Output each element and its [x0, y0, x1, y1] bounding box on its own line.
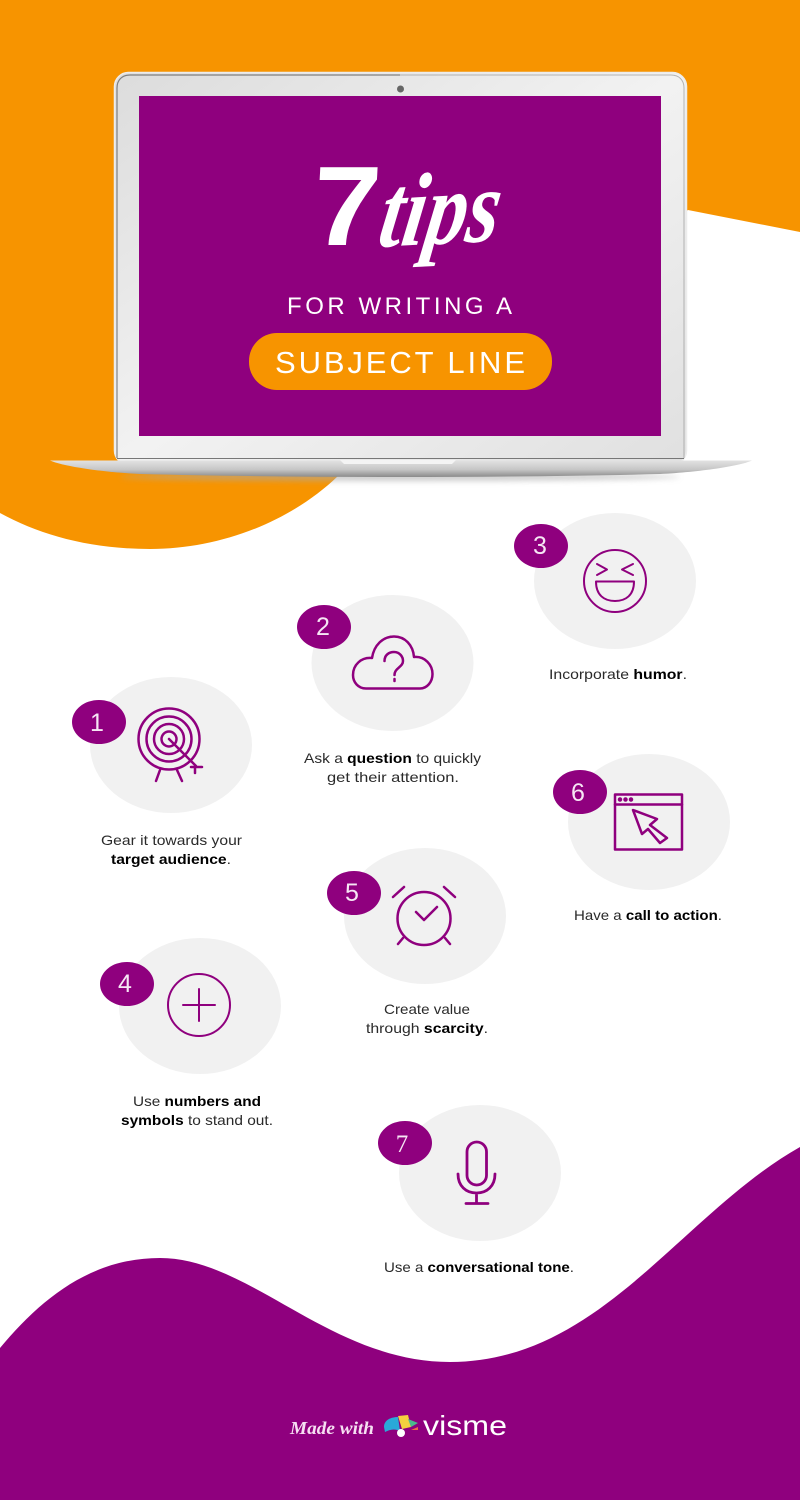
title: 7 tips [310, 142, 511, 270]
badge [100, 962, 154, 1006]
purple bottom wave [0, 1147, 800, 1500]
laptop [50, 72, 752, 481]
icon: browser cursor [615, 794, 682, 850]
logo mark [384, 1415, 418, 1437]
caption: Ask a question to quickly [304, 751, 481, 766]
lid inner edge [117, 75, 400, 458]
blob [90, 677, 252, 813]
tip 3 [514, 513, 696, 682]
pill: subject line: SUBJECT LINE [275, 345, 525, 380]
caption: Gear it towards your [101, 833, 243, 848]
laptop base [50, 460, 752, 477]
orange top background shape [0, 0, 800, 549]
tip 2 [297, 595, 481, 766]
tip 5 [327, 848, 506, 1017]
blob [399, 1105, 561, 1241]
number: 6 [571, 779, 585, 807]
number: 2 [316, 613, 330, 641]
icon: alarm clock [393, 887, 455, 945]
blob [568, 754, 730, 890]
screen [139, 96, 661, 436]
caption: Use numbers and [133, 1094, 261, 1109]
tip 7 [378, 1105, 574, 1275]
blob [312, 595, 474, 731]
caption: Use a conversational tone . [384, 1260, 574, 1275]
numeral 7: 7 [310, 142, 384, 269]
badge [378, 1121, 432, 1165]
tip 4 [100, 938, 281, 1109]
icon: laughing face [584, 550, 646, 612]
number: 7 [396, 1131, 408, 1158]
badge [514, 524, 568, 568]
number: 1 [90, 709, 104, 737]
blob [534, 513, 696, 649]
caption: Create value [384, 1002, 470, 1017]
pill: subject line [249, 333, 552, 390]
icon: microphone [458, 1142, 495, 1204]
tip 6 [553, 754, 730, 923]
number: 4 [118, 970, 132, 998]
word tips: tips [372, 148, 511, 270]
badge [327, 871, 381, 915]
number: 3 [533, 532, 547, 560]
webcam [397, 86, 404, 92]
caption line 2: target audience . [111, 852, 231, 867]
caption line 2: through scarcity . [366, 1021, 488, 1036]
badge [72, 700, 126, 744]
number: 5 [345, 879, 359, 907]
caption: Have a call to action . [574, 908, 722, 923]
made with: Made with [289, 1418, 374, 1438]
badge [297, 605, 351, 649]
subtitle: FOR WRITING A [287, 293, 512, 320]
caption line 2: get their attention. [327, 770, 459, 785]
hinge notch [340, 460, 456, 464]
icon: plus circle [168, 974, 230, 1036]
badge [553, 770, 607, 814]
base shadow [120, 473, 680, 481]
caption line 2: symbols to stand out. [121, 1113, 273, 1128]
icon: cloud question [353, 636, 432, 688]
blob [119, 938, 281, 1074]
footer: made with visme [289, 1410, 507, 1441]
blob [344, 848, 506, 984]
laptop lid [114, 72, 686, 464]
visme wordmark: visme [423, 1410, 507, 1441]
icon: target [138, 708, 202, 781]
tip 1 [72, 677, 252, 848]
caption: Incorporate humor . [549, 667, 687, 682]
